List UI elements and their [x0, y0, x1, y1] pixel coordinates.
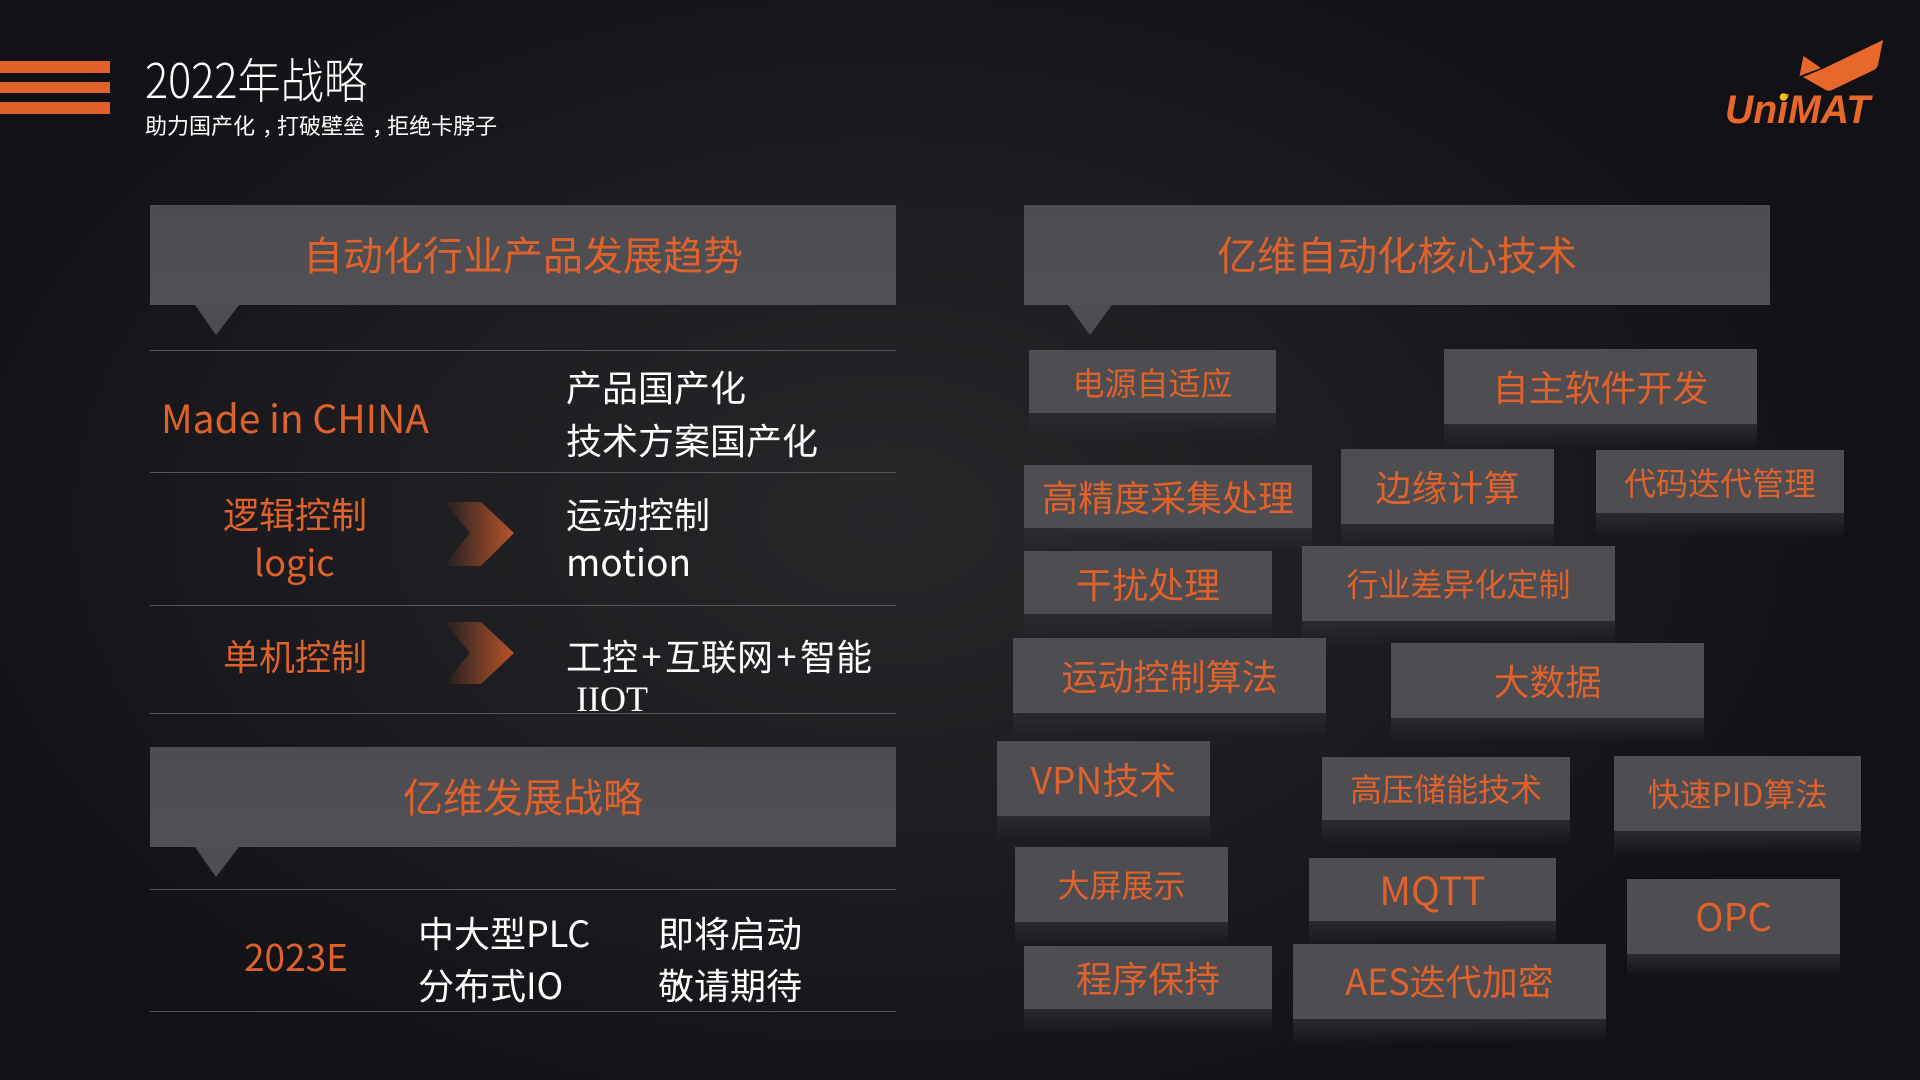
panel heading: 亿维发展战略: 亿维发展战略: [403, 766, 643, 824]
tag: 快速PID算法: 快速PID算法: [1648, 770, 1827, 816]
tag: 大数据: [1391, 643, 1704, 734]
label: Made in CHINA: Made in CHINA: [161, 389, 429, 445]
tag: MQTT: MQTT: [1379, 861, 1486, 917]
text: 技术方案国产化: 技术方案国产化: [566, 413, 818, 465]
tag: 高精度采集处理: 高精度采集处理: [1042, 470, 1294, 522]
tag: 运动控制算法: [1013, 638, 1326, 724]
tag: OPC: OPC: [1695, 887, 1772, 942]
tag: 大屏展示: 大屏展示: [1057, 860, 1186, 906]
tag: 边缘计算: 边缘计算: [1375, 460, 1520, 512]
tag: 自主软件开发: 自主软件开发: [1492, 360, 1708, 412]
label: 2023E: 2023E: [244, 928, 348, 982]
text: 工控+互联网+智能: 工控+互联网+智能: [566, 629, 872, 681]
text: IIOT: IIOT: [576, 679, 648, 719]
text: motion: motion: [566, 533, 691, 587]
tag: 程序保持: 程序保持: [1076, 951, 1220, 1003]
tag: 电源自适应: [1029, 350, 1276, 422]
tag: OPC: [1627, 879, 1840, 970]
tag: VPN技术: VPN技术: [1031, 750, 1176, 804]
subtitle: 助力国产化 ，打破壁垒 ，拒绝卡脖子: [145, 109, 497, 142]
text: 分布式IO: 分布式IO: [418, 958, 563, 1010]
tag: MQTT: [1309, 858, 1556, 938]
tag: 电源自适应: 电源自适应: [1072, 359, 1232, 405]
tag: 高精度采集处理: [1024, 465, 1312, 537]
tag: AES迭代加密: [1293, 944, 1606, 1036]
tag: AES迭代加密: AES迭代加密: [1345, 954, 1554, 1006]
tag: 大数据: 大数据: [1493, 654, 1602, 706]
tag: 自主软件开发: [1444, 349, 1757, 440]
tag: 行业差异化定制: [1302, 546, 1615, 636]
tag: 边缘计算: [1341, 449, 1554, 537]
logo: UniMAT: [1725, 40, 1883, 130]
panel heading: 亿维发展战略: [150, 747, 896, 877]
title: 2022年战略: [145, 42, 367, 112]
panel heading: 自动化行业产品发展趋势: 自动化行业产品发展趋势: [303, 224, 743, 282]
panel heading: 亿维自动化核心技术: 亿维自动化核心技术: [1217, 224, 1577, 282]
tag: 代码迭代管理: 代码迭代管理: [1624, 459, 1816, 505]
label: 单机控制: 单机控制: [223, 629, 367, 681]
tag: 干扰处理: [1024, 551, 1272, 622]
tag: 高压储能技术: 高压储能技术: [1350, 764, 1542, 810]
text: 产品国产化: 产品国产化: [566, 360, 746, 412]
text: 敬请期待: 敬请期待: [658, 958, 802, 1010]
label: 逻辑控制: 逻辑控制: [223, 487, 367, 539]
tag: 快速PID算法: [1614, 756, 1861, 848]
panel heading: 亿维自动化核心技术: [1024, 205, 1770, 335]
arrow: [448, 622, 514, 684]
text: 即将启动: 即将启动: [658, 906, 802, 958]
tag: 高压储能技术: [1322, 757, 1570, 836]
tag: 行业差异化定制: 行业差异化定制: [1346, 560, 1570, 606]
arrow: [448, 502, 514, 566]
tag: 干扰处理: 干扰处理: [1076, 557, 1220, 609]
label: logic: logic: [254, 535, 335, 587]
panel heading: 自动化行业产品发展趋势: [150, 205, 896, 335]
tag: VPN技术: [997, 741, 1210, 828]
text: 中大型PLC: 中大型PLC: [418, 906, 590, 958]
menu bars icon: [0, 61, 110, 114]
text: 运动控制: 运动控制: [566, 487, 710, 539]
tag: 程序保持: [1024, 946, 1272, 1024]
tag: 运动控制算法: 运动控制算法: [1061, 648, 1278, 700]
tag: 代码迭代管理: [1596, 450, 1844, 529]
tag: 大屏展示: [1015, 847, 1228, 936]
